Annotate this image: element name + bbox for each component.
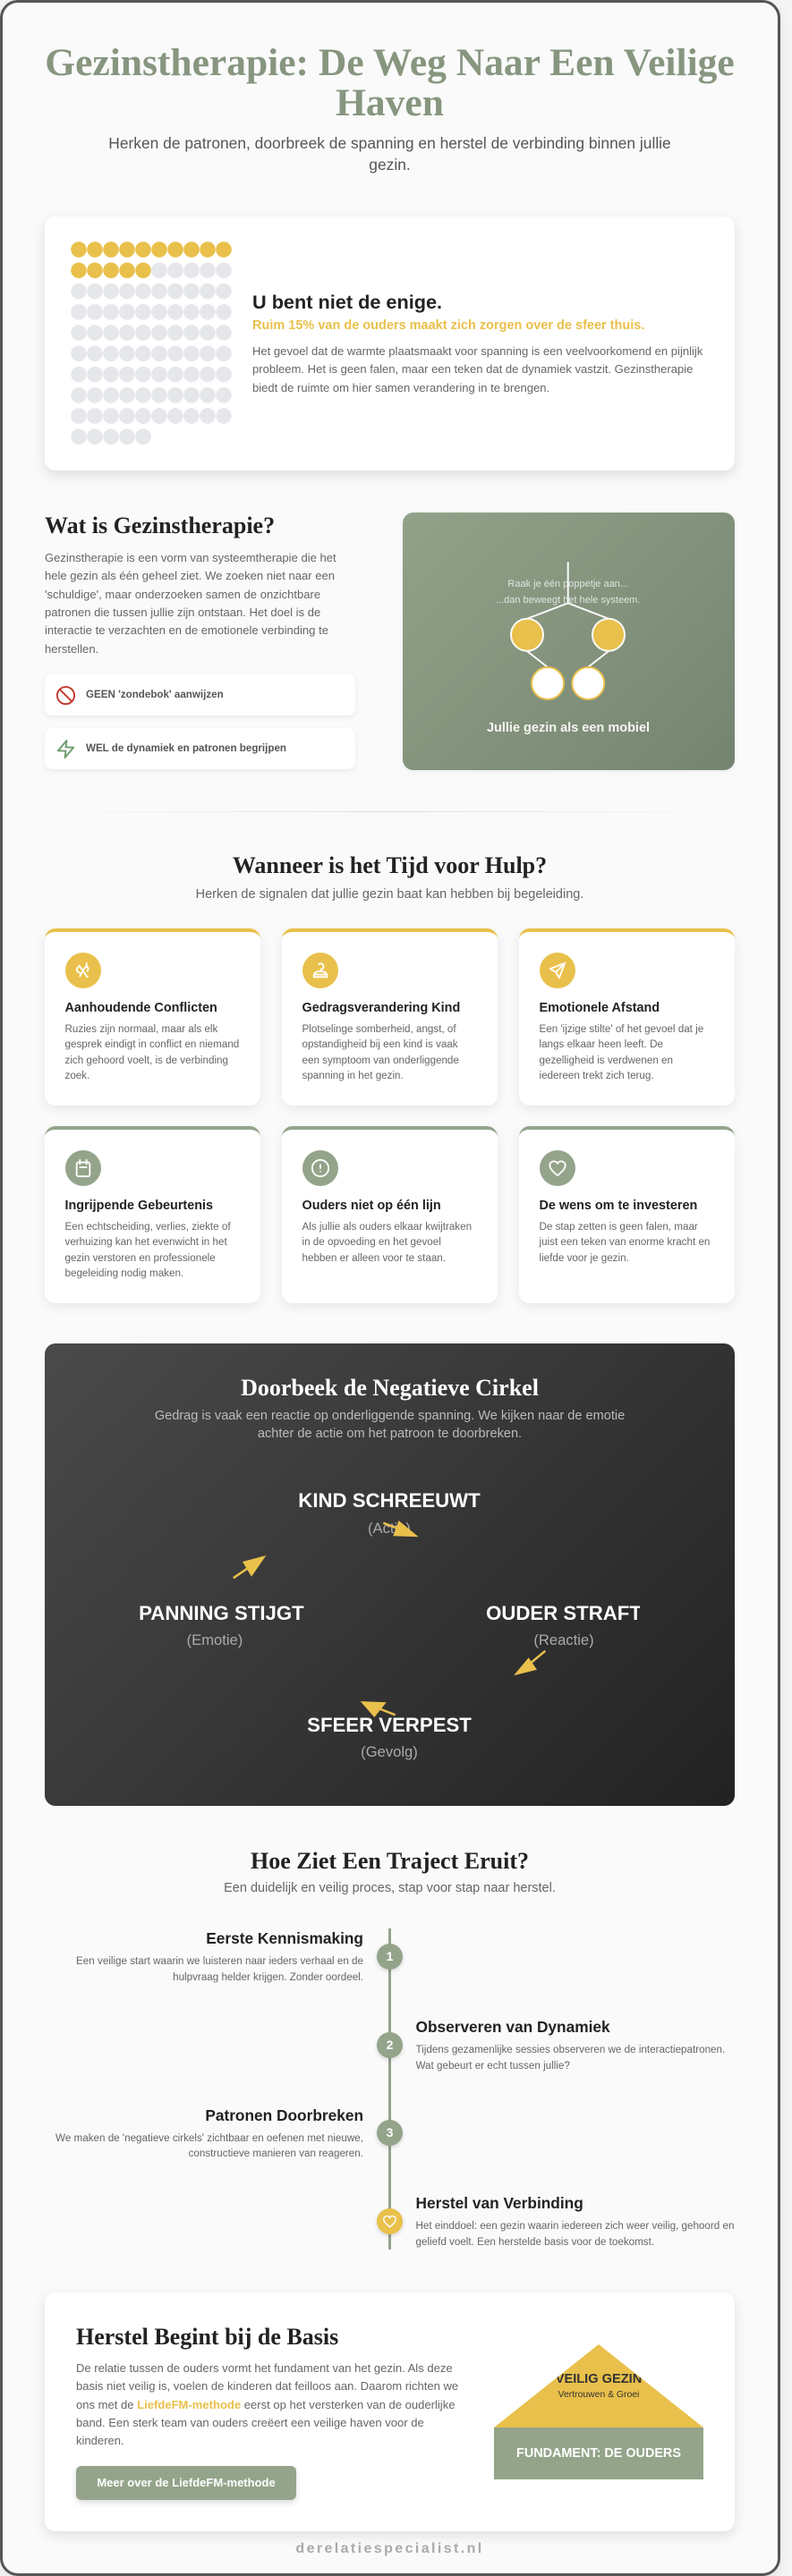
callout: understand dynamics: WEL de dynamiek en patronen begrijpen xyxy=(86,742,286,754)
diagram: mobile: Raak je één poppetje aan... xyxy=(507,579,628,589)
signal card: afstand: langs elkaar heen leeft. De xyxy=(539,1038,663,1050)
body text: foundation: De relatie tussen de ouders vormt het fundament van het gezin. Als deze xyxy=(76,2361,453,2375)
step 1 marker xyxy=(377,1944,403,1970)
step 4 text: Het einddoel: een gezin waarin iedereen zich weer veilig, gehoord en xyxy=(415,2220,734,2232)
signal card: investeren xyxy=(519,1126,735,1303)
panel: foundation xyxy=(45,2292,735,2531)
signal card: conflicten xyxy=(45,928,260,1106)
signal card: kind: een symptoom van onderliggende xyxy=(302,1055,459,1066)
step 1 marker: 1 xyxy=(387,1949,393,1963)
body text: foundation: basis niet veilig is, voelen de kinderen dat feilloos aan. Daarom richten we xyxy=(76,2379,458,2393)
chart: 15 percent dot grid xyxy=(71,242,232,445)
subtitle: gezin. xyxy=(369,156,411,174)
arrow: result to emotion xyxy=(361,1701,396,1717)
signal card: investeren: juist een teken van enorme kracht en xyxy=(539,1236,710,1248)
step 2 marker: 2 xyxy=(387,2038,393,2052)
step 4 text: geliefd voelt. Een herstelde basis voor de toekomst. xyxy=(415,2236,654,2247)
body text: biedt de ruimte om hier samen verandering in te brengen. xyxy=(252,381,549,394)
title xyxy=(45,41,735,124)
panel: statistic card xyxy=(45,216,735,470)
body text xyxy=(252,344,703,394)
icon: conflict xyxy=(64,953,100,988)
subtitle: Herken de patronen, doorbreek de spanning en herstel de verbinding binnen jullie xyxy=(108,134,671,152)
signal card: kind: spanning in het gezin. xyxy=(302,1070,404,1081)
signal card: investeren: De wens om te investeren xyxy=(539,1199,697,1213)
panel: family mobile xyxy=(403,513,735,770)
title: Gezinstherapie: De Weg Naar Een Veilige xyxy=(45,41,735,84)
step 1 text: hulpvraag helder krijgen. Zonder oordeel. xyxy=(173,1971,363,1982)
arrow: reaction to result xyxy=(514,1651,545,1675)
step 2 text: Wat gebeurt er echt tussen jullie? xyxy=(415,2059,570,2072)
footer: source: derelatiespecialist.nl xyxy=(295,2541,484,2556)
diagram: cycle xyxy=(139,1489,640,1760)
signal card: kind xyxy=(282,928,498,1106)
signal card: gebeurtenis: gezin verstoren en professionele xyxy=(64,1252,216,1264)
panel: negative cycle xyxy=(45,1343,735,1806)
button: Meer over de LiefdeFM-methode xyxy=(97,2476,276,2489)
signal card: ouders xyxy=(282,1126,498,1303)
signal card: afstand: Emotionele Afstand xyxy=(539,1001,660,1015)
node: action: (Actie) xyxy=(368,1520,411,1537)
step 3 text xyxy=(55,2106,363,2159)
text: definition: patronen die tussen jullie zijn ontstaan. Het doel is de xyxy=(45,606,320,619)
node: action: KIND SCHREEUWT xyxy=(298,1489,481,1512)
subheading: traject: Een duidelijk en veilig proces, stap voor stap naar herstel. xyxy=(224,1881,556,1895)
signal card: ouders: hebben er alleen voor te staan. xyxy=(302,1252,446,1264)
signal card: gebeurtenis xyxy=(45,1126,260,1303)
signal card: conflicten: zich gehoord voelt, is de verbinding xyxy=(64,1055,228,1066)
heading: foundation: Herstel Begint bij de Basis xyxy=(76,2324,338,2350)
signal card: conflicten: Ruzies zijn normaal, maar als elk xyxy=(64,1023,217,1035)
heading: negative cycle: Doorbeek de Negatieve Cirkel xyxy=(241,1375,539,1401)
subheading: when to seek help: Herken de signalen dat jullie gezin baat kan hebben bij begeleiding. xyxy=(196,887,583,902)
step 1 text xyxy=(76,1929,363,1982)
signal card: afstand: iedereen trekt zich terug. xyxy=(539,1070,654,1081)
step 2 marker xyxy=(377,2032,403,2057)
node: result: (Gevolg) xyxy=(361,1743,418,1760)
icon: paper plane xyxy=(539,953,575,988)
icon: alert xyxy=(302,1150,338,1186)
signal card: afstand: gezelligheid is verdwenen en xyxy=(539,1055,673,1066)
signal card: ouders: Ouders niet op één lijn xyxy=(302,1199,441,1213)
step 2 text xyxy=(415,2018,725,2072)
diagram: house xyxy=(494,2344,703,2479)
signal card: kind: Gedragsverandering Kind xyxy=(302,1001,460,1015)
signal card: gebeurtenis: Ingrijpende Gebeurtenis xyxy=(64,1199,213,1213)
step 4 text xyxy=(415,2194,734,2247)
heading: not alone: U bent niet de enige. xyxy=(252,291,442,313)
signal card: kind: Plotselinge somberheid, angst, of xyxy=(302,1023,456,1035)
roof: safe family xyxy=(494,2344,703,2428)
heading: traject: Hoe Ziet Een Traject Eruit? xyxy=(251,1848,529,1874)
subtitle xyxy=(108,134,671,174)
step 3 text: Patronen Doorbreken xyxy=(205,2106,363,2123)
signal card: conflicten: gesprek eindigt in conflict en niemand xyxy=(64,1038,239,1050)
text: definition: Gezinstherapie is een vorm van systeemtherapie die het xyxy=(45,551,336,564)
node: reaction: (Reactie) xyxy=(533,1631,594,1648)
signal card: conflicten: Aanhoudende Conflicten xyxy=(64,1001,217,1015)
step 3 text: We maken de 'negatieve cirkels' zichtbaar en oefenen met nieuwe, xyxy=(55,2132,363,2143)
title: Haven xyxy=(336,81,444,124)
step 3 marker: 3 xyxy=(387,2125,393,2140)
text: definition: interactie te verzachten en de emotionele verbinding te xyxy=(45,623,328,637)
base: parents: FUNDAMENT: DE OUDERS xyxy=(516,2446,681,2461)
signal card: afstand xyxy=(519,928,735,1106)
arrow: emotion to action xyxy=(234,1555,266,1578)
node: action xyxy=(298,1489,481,1537)
heading: wat is gezinstherapie: Wat is Gezinstherapie? xyxy=(45,513,275,538)
signal card: kind: opstandigheid bij een kind is vaak xyxy=(302,1038,458,1050)
text: definition: hele gezin als één geheel ziet. We zoeken niet naar een xyxy=(45,569,335,582)
button xyxy=(76,2466,296,2500)
signal card: gebeurtenis: verhuizing kan het evenwicht in het xyxy=(64,1236,227,1248)
text: definition: herstellen. xyxy=(45,642,98,656)
highlighted statistic: Ruim 15% van de ouders maakt zich zorgen over de sfeer thuis. xyxy=(252,318,644,333)
timeline xyxy=(376,1928,405,2250)
step 1 text: Een veilige start waarin we luisteren naar ieders verhaal en de xyxy=(76,1955,363,1967)
step 4 marker xyxy=(377,2208,403,2234)
icon: ban xyxy=(55,686,75,705)
icon: calendar xyxy=(64,1150,100,1186)
signal card: gebeurtenis: Een echtscheiding, verlies, ziekte of xyxy=(64,1221,231,1233)
step 1 text: Eerste Kennismaking xyxy=(206,1929,363,1947)
roof: safe family: Vertrouwen & Groei xyxy=(558,2390,639,2400)
subheading: negative cycle xyxy=(155,1409,625,1441)
step 2 text: Tijdens gezamenlijke sessies observeren we de interactiepatronen. xyxy=(415,2044,725,2055)
icon: heart xyxy=(539,1150,575,1186)
roof: safe family: VEILIG GEZIN xyxy=(556,2372,642,2386)
signal card: afstand: Een 'ijzige stilte' of het gevoel dat je xyxy=(539,1023,703,1035)
step 4 text: Herstel van Verbinding xyxy=(415,2194,583,2212)
callout: no scapegoat xyxy=(45,674,355,716)
signal card: ouders: in de opvoeding en het gevoel xyxy=(302,1236,441,1248)
node: result xyxy=(307,1714,472,1760)
step 3 text: constructieve manieren van reageren. xyxy=(189,2148,363,2159)
step 3 marker xyxy=(377,2120,403,2146)
signal card: investeren: liefde voor je gezin. xyxy=(539,1252,629,1264)
body text: foundation: kinderen. xyxy=(76,2434,124,2447)
text: definition: 'schuldige', maar onderzoeken samen de onzichtbare xyxy=(45,588,320,601)
node: emotion xyxy=(125,1602,304,1648)
callout: no scapegoat: GEEN 'zondebok' aanwijzen xyxy=(86,689,224,700)
body text: foundation xyxy=(76,2361,458,2447)
text: definition xyxy=(45,551,336,656)
body text: Het gevoel dat de warmte plaatsmaakt voor spanning is een veelvoorkomend en pijnlijk xyxy=(252,344,703,358)
body text: foundation: ons met de LiefdeFM-methode eerst op het versterken van de ouderlijke xyxy=(76,2398,455,2411)
signal card: conflicten: zoek. xyxy=(64,1070,89,1081)
body text: foundation: band. Een sterk team van ouders creëert een veilige haven voor de xyxy=(76,2416,424,2429)
arrow: action to reaction xyxy=(383,1521,419,1537)
caption: mobile: Jullie gezin als een mobiel xyxy=(487,721,650,735)
diagram: mobile: ...dan beweegt het hele systeem. xyxy=(496,595,640,606)
icon: lightning xyxy=(57,740,75,758)
node: emotion: (Emotie) xyxy=(187,1631,243,1648)
node: reaction xyxy=(486,1602,642,1648)
step 2 text: Observeren van Dynamiek xyxy=(415,2018,610,2036)
signal card: gebeurtenis: begeleiding nodig maken. xyxy=(64,1267,183,1279)
callout: understand dynamics xyxy=(45,728,355,769)
signal card: ouders: Als jullie als ouders elkaar kwijtraken xyxy=(302,1221,472,1233)
node: reaction: OUDER STRAFT xyxy=(486,1602,640,1624)
subheading: negative cycle: Gedrag is vaak een reactie op onderliggende spanning. We kijken naar de emotie xyxy=(155,1409,625,1423)
base: parents xyxy=(494,2428,703,2479)
body text: probleem. Het is geen falen, maar een teken dat de dynamiek vastzit. Gezinstherapie xyxy=(252,362,693,376)
subheading: negative cycle: achter de actie om het patroon te doorbreken. xyxy=(258,1427,522,1441)
icon: child xyxy=(302,953,338,988)
heading: when to seek help: Wanneer is het Tijd voor Hulp? xyxy=(233,852,547,878)
signal card: investeren: De stap zetten is geen falen, maar xyxy=(539,1221,698,1233)
node: result: SFEER VERPEST xyxy=(307,1714,472,1736)
diagram: mobile xyxy=(496,562,640,700)
